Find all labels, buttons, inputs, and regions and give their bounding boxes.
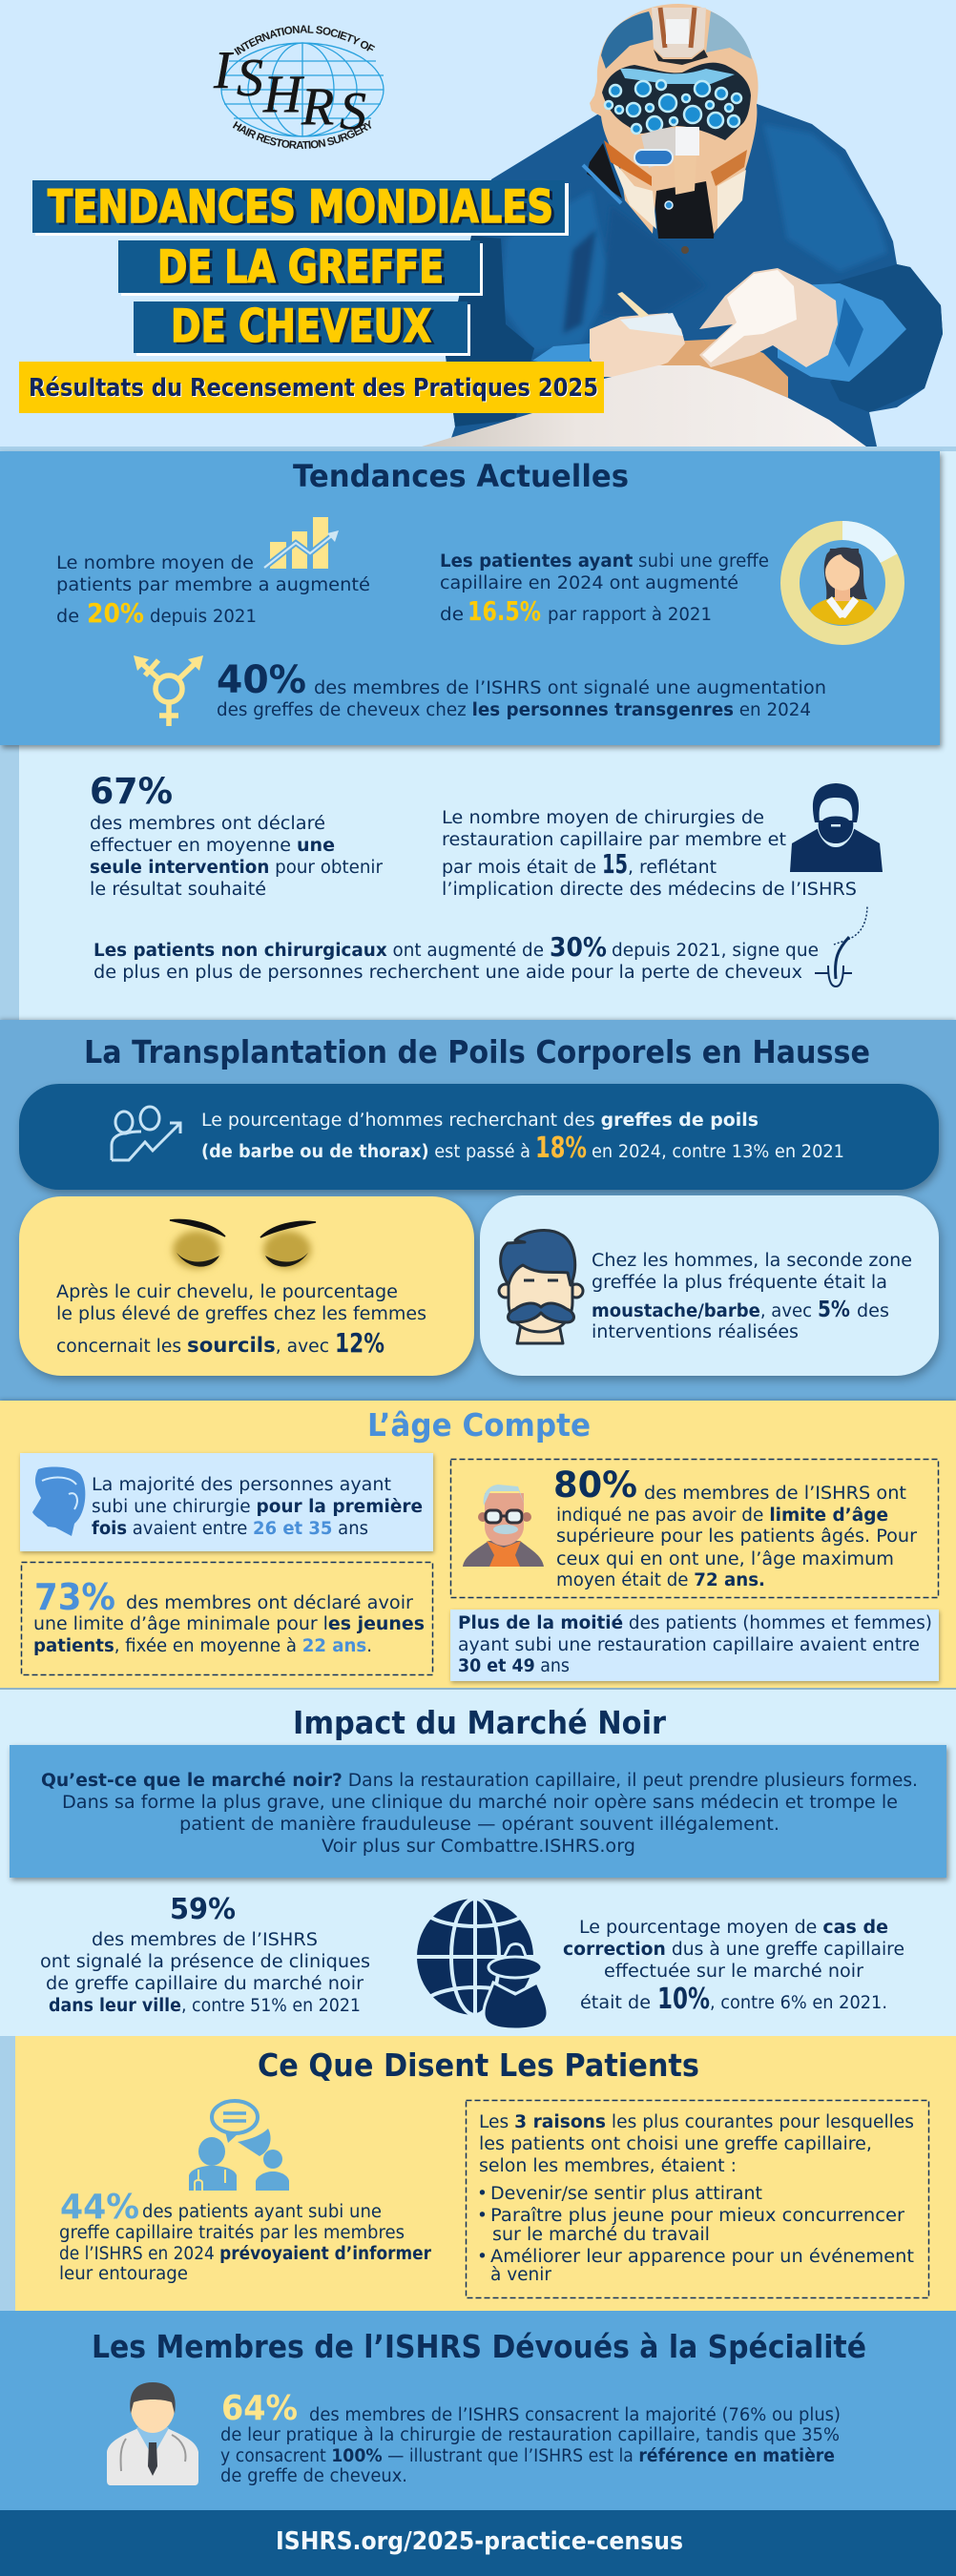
box: over half aged 30 to 49: Plus de la moitié des patients (hommes et femmes) xyxy=(458,1613,932,1633)
card: eyebrows 12%: concernait les sourcils, avec xyxy=(56,1334,329,1357)
stat: non-surgical patients 30% xyxy=(94,931,819,983)
panel: black market xyxy=(0,1688,956,2036)
card: moustache/beard 5%: moustache/barbe, avec xyxy=(592,1301,812,1321)
stat: patients per member 20%: 20% xyxy=(87,597,144,629)
stat: 15 surgeries per month: Le nombre moyen de chirurgies de xyxy=(442,808,764,828)
box: black market definition: Qu’est-ce que le marché noir? Dans la restauration capillaire, il peut prendre plusieurs formes. xyxy=(41,1771,918,1791)
icon: people and arrow xyxy=(112,1107,180,1160)
stat: transgender 40% xyxy=(217,658,826,720)
stat: 59% clinics in their city: ont signalé la présence de cliniques xyxy=(40,1952,370,1972)
subtitle banner: Résultats du Recensement des Pratiques 2025 xyxy=(29,374,598,403)
box: top 3 reasons: • xyxy=(477,2184,488,2204)
card: eyebrows 12% xyxy=(19,1196,474,1376)
stat: non-surgical patients 30%: de plus en plus de personnes recherchent une aide pour la perte de cheveux xyxy=(94,963,802,983)
patient sheet xyxy=(422,365,866,447)
box: 73% minimum age: une limite d’âge minimale pour l es jeunes xyxy=(33,1614,425,1634)
icon: moustached man xyxy=(499,1231,583,1343)
title line 1: TENDANCES MONDIALES xyxy=(48,181,553,234)
box: 80% no upper age limit xyxy=(450,1460,939,1597)
box: top 3 reasons: sur le marché du travail xyxy=(492,2225,710,2245)
box: top 3 reasons: Améliorer leur apparence pour un événement xyxy=(490,2247,914,2267)
card: moustache/beard 5%: Chez les hommes, la seconde zone xyxy=(592,1251,912,1271)
stat: 59% clinics in their city xyxy=(40,1893,370,2016)
box: first surgery age xyxy=(20,1453,433,1551)
box: 80% no upper age limit: 80% xyxy=(553,1465,637,1506)
panel: current trends lower area xyxy=(0,447,956,1020)
stat: 15 surgeries per month xyxy=(442,808,857,900)
stat: 59% clinics in their city: dans leur ville, contre 51% en 2021 xyxy=(49,1996,361,2016)
stat: transgender 40%: des greffes de cheveux chez les personnes transgenres en 2024 xyxy=(217,700,811,720)
card: moustache/beard 5% xyxy=(480,1195,939,1376)
stat: 64% devote majority of practice xyxy=(220,2389,841,2486)
stat: 64% devote majority of practice: y consacrent 100% — illustrant que l’ISHRS est la référence en matière xyxy=(220,2446,835,2466)
card: moustache/beard 5%: interventions réalisées xyxy=(592,1322,799,1342)
stat: 67% single intervention: 67% xyxy=(90,771,173,812)
box: black market definition: patient de manière frauduleuse — opérant souvent illégalement. xyxy=(179,1815,779,1835)
box: top 3 reasons: les patients ont choisi une greffe capillaire, xyxy=(479,2134,872,2154)
card: eyebrows 12%: 12% xyxy=(335,1327,384,1359)
stat: 44% intend to tell others: des patients ayant subi une xyxy=(142,2202,382,2222)
stat: 15 surgeries per month: 15 xyxy=(602,848,628,880)
card: men body hair grafts 18%: 18% xyxy=(535,1132,587,1165)
stat: transgender 40%: des membres de l’ISHRS ont signalé une augmentation xyxy=(314,678,826,698)
stat: 59% clinics in their city: 59% xyxy=(170,1893,236,1926)
stat: 44% intend to tell others xyxy=(59,2188,432,2284)
stat: patients per member 20%: Le nombre moyen de xyxy=(56,553,254,573)
stat: 67% single intervention xyxy=(90,771,383,900)
stat: non-surgical patients 30%: 30% xyxy=(550,931,607,963)
stat: 44% intend to tell others: 44% xyxy=(60,2188,139,2227)
stat: 44% intend to tell others: leur entourage xyxy=(59,2264,188,2284)
card: men body hair grafts 18%: Le pourcentage d’hommes recherchant des greffes de poils xyxy=(201,1111,759,1131)
right glove xyxy=(699,268,838,367)
stat: 67% single intervention: effectuer en moyenne une xyxy=(90,836,335,856)
stat: transgender 40%: 40% xyxy=(217,658,306,702)
card: moustache/beard 5%: 5% xyxy=(818,1298,850,1322)
icon: blue head profile xyxy=(32,1466,85,1536)
heading: Tendances Actuelles: Tendances Actuelles xyxy=(293,458,629,494)
box: first surgery age: fois avaient entre 26 et 35 ans xyxy=(92,1519,368,1539)
stat: 59% clinics in their city: de greffe capillaire du marché noir xyxy=(46,1974,364,1994)
icon: hair follicle xyxy=(815,906,867,987)
title line 2: DE LA GREFFE xyxy=(157,241,444,294)
box: top 3 reasons: selon les membres, étaient : xyxy=(479,2156,737,2176)
stat: 15 surgeries per month: par mois était de xyxy=(442,858,596,878)
box: black market definition: Voir plus sur Combattre.ISHRS.org xyxy=(322,1837,635,1857)
stat: 15 surgeries per month: restauration capillaire par membre et xyxy=(442,830,786,850)
card: men body hair grafts 18%: (de barbe ou de thorax) est passé à xyxy=(201,1142,530,1162)
box: top 3 reasons: • xyxy=(477,2206,488,2226)
stat: 67% single intervention: seule intervention pour obtenir xyxy=(90,858,383,878)
stat: 44% intend to tell others: de l’ISHRS en 2024 prévoyaient d’informer xyxy=(59,2244,432,2264)
box: 80% no upper age limit: indiqué ne pas avoir de limite d’âge xyxy=(556,1506,888,1526)
panel: body hair transplantation xyxy=(0,1020,956,1401)
box: over half aged 30 to 49: ayant subi une restauration capillaire avaient entre xyxy=(458,1635,920,1655)
box: top 3 reasons: Devenir/se sentir plus attirant xyxy=(490,2184,762,2204)
heading: L'âge Compte: L’âge Compte xyxy=(367,1406,591,1444)
box: 73% minimum age: 73% xyxy=(34,1576,115,1618)
stat: correction cases 10%: correction dus à une greffe capillaire xyxy=(563,1940,904,1960)
stat: non-surgical patients 30%: Les patients non chirurgicaux ont augmenté de xyxy=(94,941,544,961)
icon: closed eyes with eyebrows xyxy=(170,1219,316,1269)
heading: Impact du Marché Noir: Impact du Marché Noir xyxy=(293,1704,667,1741)
illustration: surgeon operating on patient xyxy=(422,4,943,447)
stat: 64% devote majority of practice: des membres de l’ISHRS consacrent la majorité (76% ou plus) xyxy=(309,2405,841,2425)
stat: 15 surgeries per month: , reflétant xyxy=(628,858,717,878)
stat: patients per member 20%: patients par membre a augmenté xyxy=(56,575,370,595)
stat: correction cases 10%: , contre 6% en 2021. xyxy=(710,1993,887,2013)
title line 3: DE CHEVEUX xyxy=(171,301,431,353)
box: black market definition: Dans sa forme la plus grave, une clinique du marché noir opère sans médecin et trompe le xyxy=(62,1793,898,1813)
footer: census URL: ISHRS.org/2025-practice-census xyxy=(276,2527,683,2556)
stat: patients per member 20%: depuis 2021 xyxy=(150,607,257,627)
icon: growth chart xyxy=(264,517,339,569)
box: top 3 reasons: Paraître plus jeune pour mieux concurrencer xyxy=(490,2206,904,2226)
card: moustache/beard 5%: greffée la plus fréquente était la xyxy=(592,1273,887,1293)
stat: 15 surgeries per month: l’implication directe des médecins de l’ISHRS xyxy=(442,880,857,900)
stat: 64% devote majority of practice: 64% xyxy=(221,2389,298,2428)
heading: dedicated members: Les Membres de l’ISHRS Dévoués à la Spécialité xyxy=(92,2328,866,2365)
stat: 67% single intervention: des membres ont déclaré xyxy=(90,814,325,834)
icon: doctor and patient talking xyxy=(189,2101,289,2191)
subtitle banner xyxy=(19,362,604,413)
box: 80% no upper age limit: supérieure pour les patients âgés. Pour xyxy=(556,1527,917,1547)
panel: age matters xyxy=(0,1401,956,1689)
stat: correction cases 10%: était de xyxy=(580,1993,651,2013)
stat: patients per member 20% xyxy=(56,553,370,629)
left glove xyxy=(590,313,685,377)
box: top 3 reasons xyxy=(466,2101,929,2297)
surgeon head xyxy=(653,177,717,239)
stat: 64% devote majority of practice: de leur pratique à la chirurgie de restauration capillaire, tandis que 35% xyxy=(220,2425,840,2445)
box: 80% no upper age limit: ceux qui en ont une, l’âge maximum xyxy=(556,1549,894,1569)
box: over half aged 30 to 49 xyxy=(450,1610,939,1681)
panel: current trends xyxy=(0,451,940,745)
stat: correction cases 10%: 10% xyxy=(657,1983,710,2016)
icon: doctor xyxy=(107,2382,198,2485)
stat: female patients 16.5%: capillaire en 2024 ont augmenté xyxy=(440,573,738,593)
card: men body hair grafts 18%: en 2024, contre 13% en 2021 xyxy=(592,1142,844,1162)
stat: 59% clinics in their city: des membres de l’ISHRS xyxy=(92,1930,318,1950)
logo: ISHRS: ISHRS xyxy=(213,41,366,141)
panel: what patients say xyxy=(0,2036,956,2311)
stat: patients per member 20%: de xyxy=(56,607,79,627)
logo: ISHRS: HAIR RESTORATION SURGERY xyxy=(233,120,372,149)
panel: dedicated members xyxy=(0,2311,956,2510)
stat: 44% intend to tell others: greffe capillaire traités par les membres xyxy=(59,2223,405,2243)
card: eyebrows 12%: Après le cuir chevelu, le pourcentage xyxy=(56,1282,398,1302)
box: first surgery age: La majorité des personnes ayant xyxy=(92,1475,391,1495)
stat: female patients 16.5%: par rapport à 2021 xyxy=(548,605,712,625)
icon: globe with hooded figure xyxy=(417,1899,548,2029)
box: top 3 reasons: • xyxy=(477,2247,488,2267)
stat: correction cases 10% xyxy=(563,1918,904,2016)
icon: transgender symbol xyxy=(134,655,203,726)
stat: 64% devote majority of practice: de greffe de cheveux. xyxy=(220,2466,407,2486)
footer: census URL xyxy=(0,2510,956,2576)
box: black market definition xyxy=(10,1745,946,1878)
icon: woman in donut chart xyxy=(790,530,895,635)
box: 80% no upper age limit: des membres de l’ISHRS ont xyxy=(644,1484,906,1504)
patient face xyxy=(658,339,788,398)
box: 80% no upper age limit: moyen était de 72 ans. xyxy=(556,1570,765,1590)
logo: ISHRS: INTERNATIONAL SOCIETY OF xyxy=(234,25,376,55)
icon: older man xyxy=(463,1485,544,1567)
box: 73% minimum age: des membres ont déclaré avoir xyxy=(126,1593,413,1613)
stat: female patients 16.5%: 16.5% xyxy=(468,595,541,627)
panel: header xyxy=(19,4,943,447)
heading: Ce Que Disent Les Patients: Ce Que Disent Les Patients xyxy=(258,2046,699,2084)
stat: correction cases 10%: Le pourcentage moyen de cas de xyxy=(579,1918,888,1938)
stat: correction cases 10%: effectuée sur le marché noir xyxy=(604,1962,863,1982)
icon: bearded man xyxy=(790,783,883,872)
box: 73% minimum age xyxy=(21,1563,433,1675)
box: top 3 reasons: à venir xyxy=(490,2265,551,2285)
card: men body hair grafts 18% xyxy=(19,1084,939,1190)
stat: 67% single intervention: le résultat souhaité xyxy=(90,880,266,900)
box: top 3 reasons: Les 3 raisons les plus courantes pour lesquelles xyxy=(479,2112,914,2132)
stat: female patients 16.5%: Les patientes ayant subi une greffe xyxy=(440,551,769,571)
stat: non-surgical patients 30%: depuis 2021, signe que xyxy=(612,941,819,961)
card: moustache/beard 5%: des xyxy=(857,1301,889,1321)
box: 73% minimum age: patients, fixée en moyenne à 22 ans. xyxy=(33,1636,372,1656)
stat: female patients 16.5%: de xyxy=(440,605,464,625)
stat: female patients 16.5% xyxy=(440,551,769,627)
box: first surgery age: subi une chirurgie pour la première xyxy=(92,1497,423,1517)
heading: body hair: La Transplantation de Poils Corporels en Hausse xyxy=(84,1033,870,1070)
box: over half aged 30 to 49: 30 et 49 ans xyxy=(458,1656,570,1676)
card: eyebrows 12%: le plus élevé de greffes chez les femmes xyxy=(56,1304,426,1324)
